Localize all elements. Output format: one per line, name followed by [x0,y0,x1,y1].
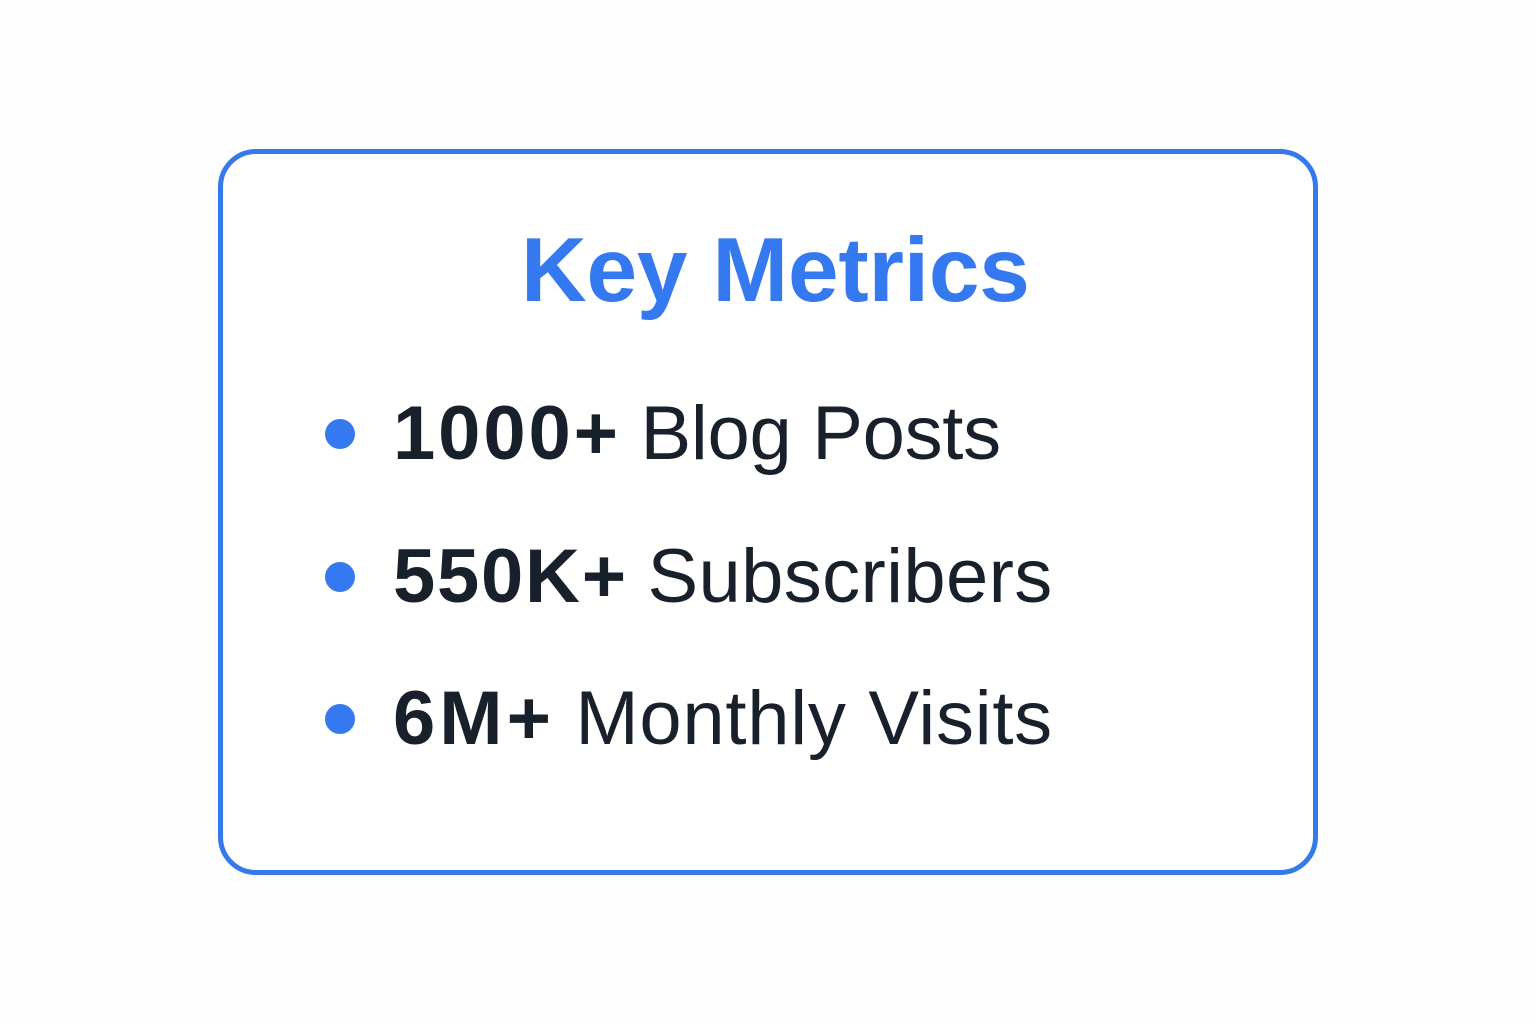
icon: bullet [325,562,355,592]
panel: key metrics card [218,149,1318,875]
metric: blog posts [325,390,1001,476]
text: 1000+ Blog Posts: 1000+ [393,390,621,476]
text: 6M+ Monthly Visits: 6M+ [393,676,555,760]
title: Key Metrics [521,220,1030,321]
icon: bullet [325,704,355,734]
text: 550K+ Subscribers [393,534,1053,618]
icon: bullet [325,419,355,449]
text: 1000+ Blog Posts [393,390,1001,476]
metric: monthly visits [325,676,1053,760]
metric: subscribers [325,534,1053,618]
text: 1000+ Blog Posts: Blog Posts [640,390,1001,476]
text: 550K+ Subscribers: Subscribers [648,534,1053,618]
text: 550K+ Subscribers: 550K+ [393,534,628,618]
text: 6M+ Monthly Visits: Monthly Visits [575,676,1053,760]
